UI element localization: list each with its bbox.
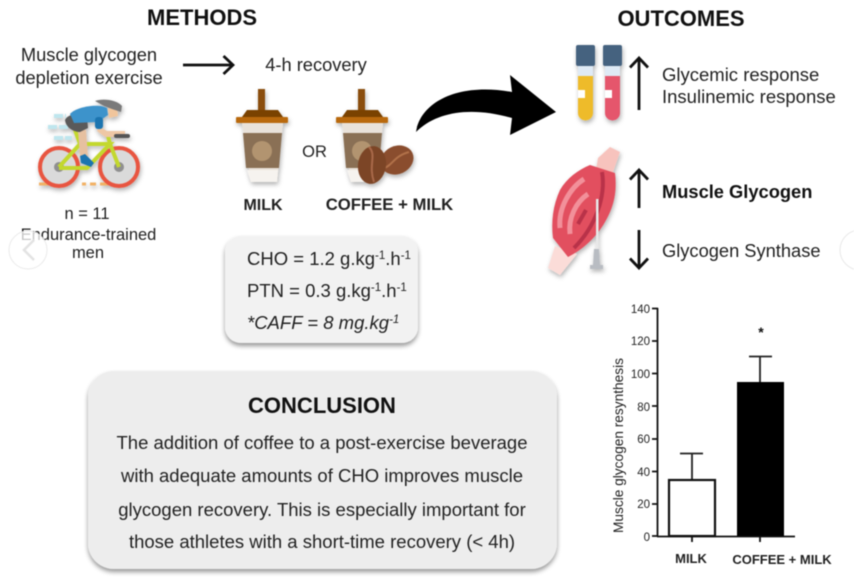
y axis and ticks <box>652 308 795 542</box>
text: protein dose: PTN = 0.3 g.kg <box>247 280 371 301</box>
heading: conclusion: CONCLUSION <box>248 393 396 418</box>
text: responses: Insulinemic response <box>662 86 836 107</box>
text: glycogen synthase: Glycogen Synthase <box>662 240 821 261</box>
y axis labels: 60 <box>637 434 650 446</box>
text: carbohydrate dose: CHO = 1.2 g.kg <box>247 248 375 269</box>
label: or: OR <box>302 143 327 161</box>
heading: outcomes: OUTCOMES <box>617 6 745 31</box>
text: protein dose: -1 <box>397 282 407 294</box>
text: conclusion body: glycogen recovery. This is especially important for <box>118 499 526 520</box>
text: carbohydrate dose: -1 <box>375 250 385 262</box>
text: recovery: 4-h recovery <box>265 54 368 75</box>
bar: coffee + milk <box>737 356 784 536</box>
x labels: COFFEE + MILK <box>732 552 832 567</box>
label: milk: MILK <box>243 197 283 214</box>
carousel button: previous <box>9 231 47 269</box>
arrow: methods to outcomes <box>416 75 556 135</box>
text: responses <box>662 64 836 107</box>
text: depletion exercise <box>15 44 163 88</box>
text: protein dose: -1 <box>371 282 381 294</box>
text: caffeine dose: -1 <box>389 314 399 326</box>
carousel button: next <box>840 230 854 270</box>
text: participants: Endurance-trained <box>21 226 156 244</box>
y axis labels: 120 <box>631 336 650 348</box>
text: carbohydrate dose: -1 <box>401 250 411 262</box>
text: conclusion body: with adequate amounts of CHO improves muscle <box>120 465 523 486</box>
icon: blood tubes <box>576 45 622 121</box>
text: responses: Glycemic response <box>662 64 819 85</box>
y axis labels: 40 <box>637 467 650 479</box>
panel: dosage <box>225 236 418 343</box>
arrow: glycogen synthase down <box>638 230 640 268</box>
icon: cyclist <box>39 100 138 186</box>
arrow: to recovery <box>183 64 233 66</box>
y axis labels: 140 <box>631 304 650 316</box>
heading: methods: METHODS <box>147 5 257 30</box>
text: conclusion body <box>116 432 528 552</box>
icon: milk cup <box>236 89 288 182</box>
y axis labels <box>631 304 650 544</box>
text: muscle glycogen: Muscle Glycogen <box>662 181 812 202</box>
x labels: MILK <box>675 551 707 566</box>
icon: coffee cup with beans <box>336 89 418 186</box>
arrow: responses up <box>638 58 640 110</box>
text: conclusion body: The addition of coffee to a post-exercise beverage <box>116 432 528 453</box>
text: participants <box>21 205 156 262</box>
y axis labels: 80 <box>637 402 650 414</box>
text: participants: n = 11 <box>64 205 110 223</box>
axis title: Muscle glycogen resynthesis <box>611 358 626 533</box>
icon: muscle with biopsy needle <box>548 147 620 275</box>
bar: milk <box>669 453 715 536</box>
text: participants: men <box>72 244 104 262</box>
y axis labels: 100 <box>631 369 650 381</box>
significance marker: * <box>758 324 764 340</box>
y axis labels: 0 <box>644 532 650 544</box>
arrow: muscle glycogen up <box>638 170 640 208</box>
bar chart: muscle glycogen resynthesis <box>611 304 832 567</box>
text: conclusion body: those athletes with a short-time recovery (< 4h) <box>129 531 515 552</box>
text: carbohydrate dose: .h <box>385 248 401 269</box>
text: protein dose: .h <box>381 280 397 301</box>
label: coffee + milk: COFFEE + MILK <box>326 195 453 214</box>
x labels <box>675 551 832 567</box>
text: depletion exercise: Muscle glycogen <box>21 44 157 65</box>
panel: conclusion <box>88 371 557 569</box>
text: depletion exercise: depletion exercise <box>15 67 163 88</box>
y axis labels: 20 <box>637 499 650 511</box>
text: caffeine dose: *CAFF = 8 mg.kg <box>247 312 389 333</box>
